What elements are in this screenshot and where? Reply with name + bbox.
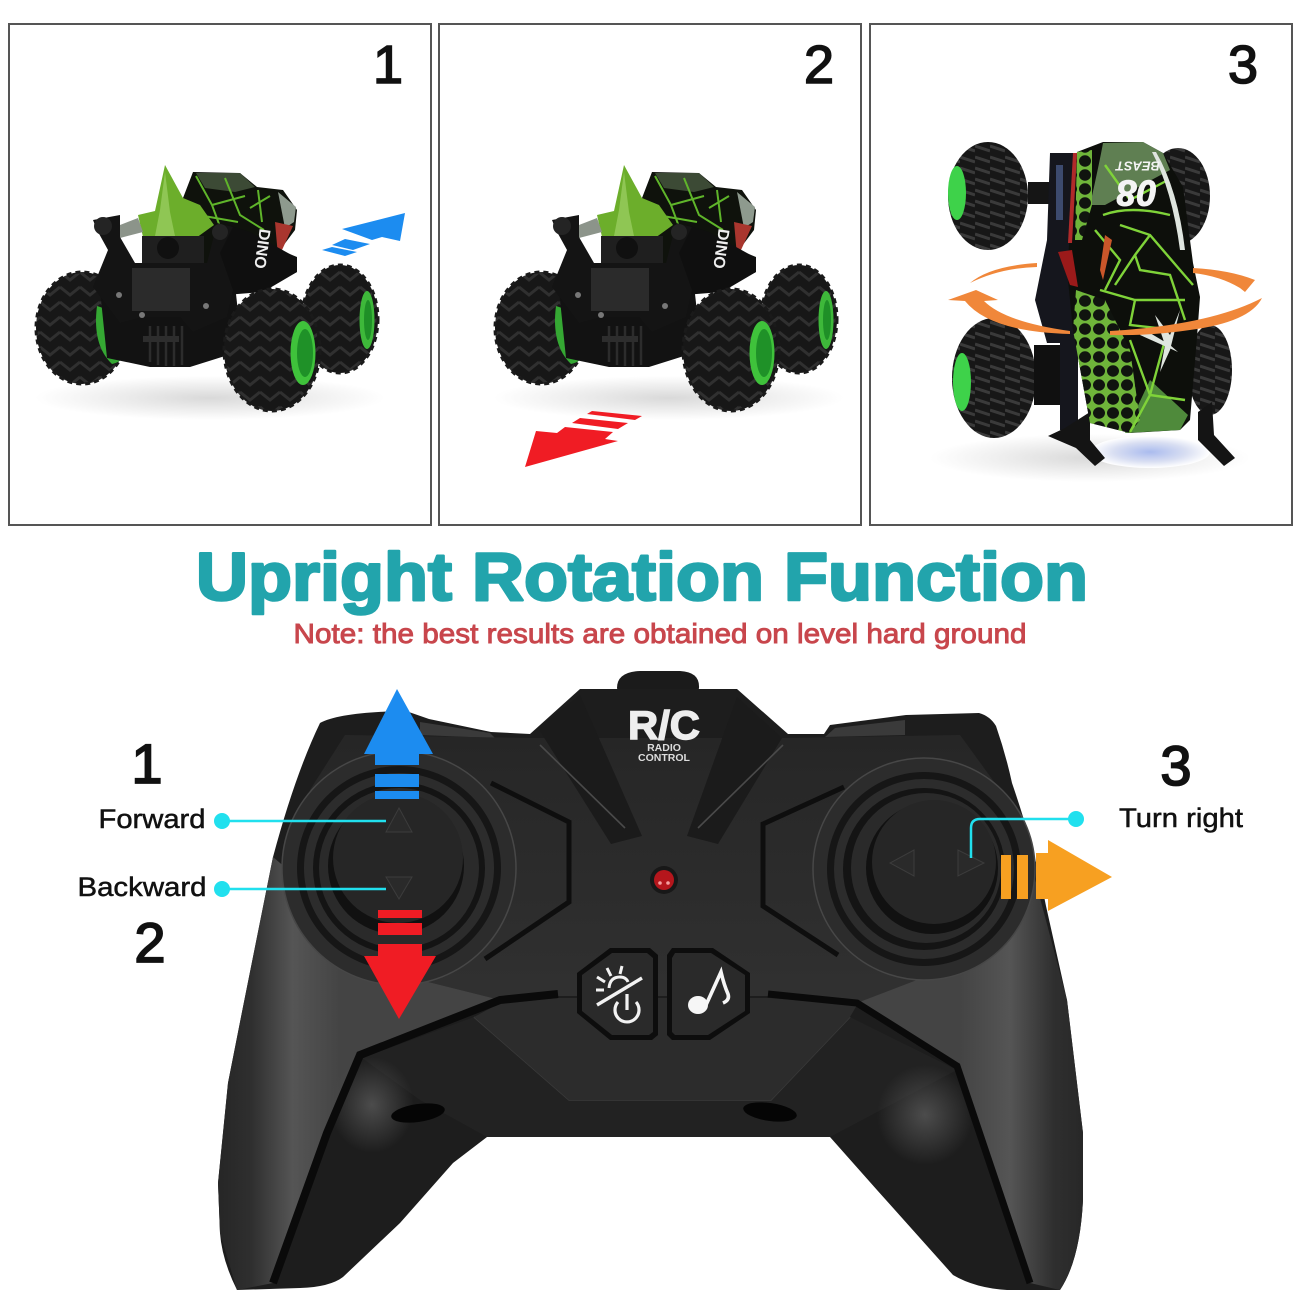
button: light and power (577, 948, 658, 1040)
number 1: 1 (373, 35, 403, 95)
arrow: red backward (525, 411, 642, 467)
arrow: blue up (364, 689, 433, 799)
arrow: orange right (1001, 840, 1112, 911)
hex edges (485, 783, 569, 959)
number 2: 2 (804, 35, 834, 95)
truck photo 2 (494, 165, 844, 420)
lower center panel (362, 1017, 957, 1137)
label: 3 turn right: 3 (1160, 734, 1192, 797)
dark wedges around logo (538, 695, 642, 844)
arrow: blue forward (322, 213, 405, 256)
R/C logo: R/C (628, 704, 700, 748)
arrow: red down (364, 910, 436, 1019)
mouth (1068, 153, 1077, 243)
label: 1 forward (98, 732, 386, 834)
arrow: orange rotation (948, 263, 1262, 335)
chassis (1028, 182, 1050, 204)
note: Note: the best results are obtained on level hard ground (294, 618, 1026, 649)
shell lettering: 08 (1117, 172, 1157, 213)
label: 3 turn right: Turn right (1119, 803, 1244, 833)
shell (1067, 142, 1200, 433)
right side panel (857, 860, 1083, 1290)
upper bumpers (420, 722, 495, 738)
label: 2 backward (78, 872, 386, 974)
remote controller (218, 671, 1083, 1290)
R/C logo: CONTROL (638, 752, 691, 764)
grip highlights (330, 1057, 414, 1153)
button: music (667, 948, 750, 1040)
label: 1 forward: 1 (131, 732, 163, 795)
truck photo 1 (35, 165, 385, 420)
label: 2 backward: Backward (78, 872, 206, 902)
label: 1 forward: Forward (98, 804, 206, 834)
panel: step 1 forward (9, 24, 431, 525)
R/C logo: RADIO (647, 742, 681, 754)
number 3: 3 (1228, 35, 1258, 95)
panel: step 2 backward (439, 24, 861, 525)
truck upright photo: BEAST (1115, 159, 1160, 174)
right joystick (813, 758, 1035, 980)
left joystick (282, 751, 516, 985)
title: Upright Rotation Function (196, 539, 1088, 615)
truck upright photo (930, 142, 1250, 482)
label: 3 turn right (971, 734, 1244, 858)
wheels (1146, 148, 1210, 244)
panel: step 3 rotation (870, 24, 1292, 525)
led (650, 866, 678, 894)
antenna knob (617, 671, 699, 705)
bottom shadows (390, 1100, 446, 1126)
left side panel (218, 857, 500, 1290)
label: 2 backward: 2 (134, 911, 166, 974)
grooves (273, 994, 558, 1283)
feet (1048, 402, 1235, 466)
body (218, 689, 1083, 1290)
face plate (280, 735, 1030, 1065)
